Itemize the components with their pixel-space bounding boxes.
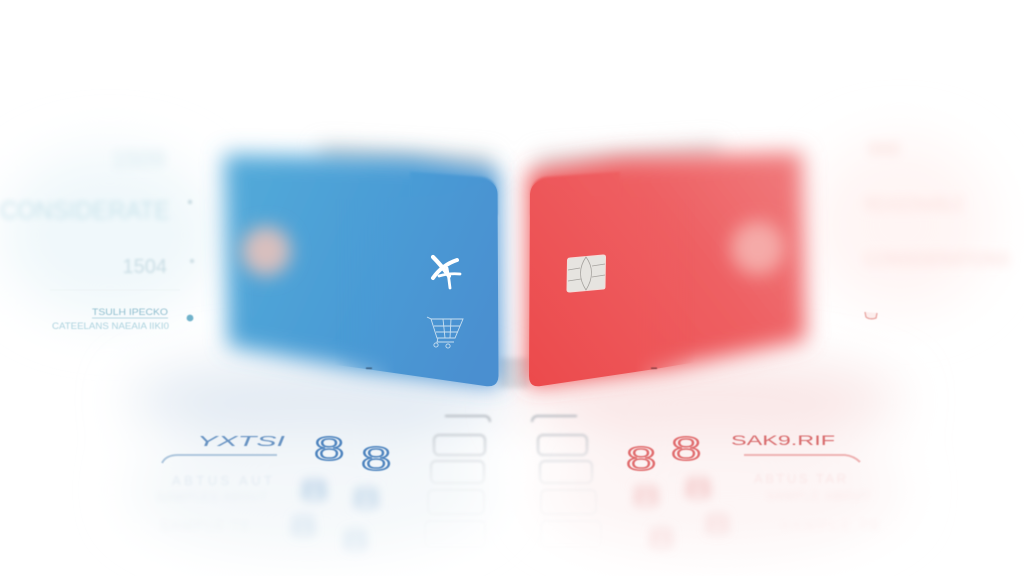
left specification list bbox=[0, 146, 194, 332]
bottom right table bbox=[532, 416, 880, 555]
bottom right table: SAMPLE ABOUT bbox=[766, 489, 871, 503]
label: wide heading: CONSIDERATE bbox=[0, 197, 170, 225]
numerals: blurred reflection rows: 8 bbox=[684, 471, 712, 504]
numerals: blurred reflection rows: 8 bbox=[290, 510, 317, 543]
label: top value: 1509 bbox=[112, 146, 165, 173]
card face: soft upper corner bbox=[531, 172, 620, 215]
blurred chip bbox=[241, 226, 291, 276]
blurred sub-labels: ABTUS TAR bbox=[754, 471, 846, 486]
numerals: blurred reflection rows: 8 bbox=[352, 481, 380, 514]
bottom left table bbox=[156, 416, 490, 557]
numerals: blurred reflection rows: 8 bbox=[300, 473, 328, 506]
card face: sharp part bbox=[342, 183, 498, 386]
numerals: blurred reflection rows: 8 bbox=[632, 479, 660, 512]
numerals: blurred reflection rows: 8 bbox=[648, 522, 675, 555]
numerals: blurred reflection rows bbox=[290, 473, 380, 557]
table boxes bbox=[425, 416, 490, 547]
blurred chip bbox=[731, 221, 785, 275]
heading rule bbox=[744, 455, 860, 462]
dots: faint markers bbox=[188, 200, 194, 263]
shadow behind card tops bbox=[320, 144, 720, 176]
numerals: top row: 8 bbox=[626, 440, 656, 477]
card feet bbox=[366, 368, 657, 369]
label: year value: 1504 bbox=[122, 256, 167, 278]
bottom left table: SAMPLES ABOUT bbox=[156, 490, 269, 504]
numerals: top row: 8 bbox=[671, 430, 701, 467]
haze: right of the red card bbox=[810, 140, 990, 310]
floor tint: red side bbox=[520, 360, 900, 550]
icon: card chip bbox=[567, 255, 606, 292]
haze: left of the blue card bbox=[0, 150, 220, 320]
heading rule bbox=[162, 455, 277, 463]
card face: sharp part bbox=[529, 183, 688, 386]
bottom right table: SAMPLE TE bbox=[780, 517, 880, 533]
table boxes bbox=[532, 416, 601, 547]
heading: YXTSI bbox=[197, 433, 285, 450]
numerals: blurred reflection rows: 8 bbox=[342, 524, 369, 557]
rule lines bbox=[50, 290, 180, 318]
label: detail line one: TSULH IPECKO bbox=[92, 307, 168, 318]
numerals: top row bbox=[626, 430, 701, 477]
right specification list bbox=[864, 142, 1010, 319]
heading: SAK9.RIF bbox=[731, 432, 835, 448]
numerals: blurred reflection rows bbox=[632, 471, 731, 555]
bottom left table: SAMPLE TE bbox=[160, 517, 250, 533]
icon: airplane bbox=[433, 257, 460, 288]
label: detail line two: CATEELANS NAEAIA IIKI0 bbox=[52, 321, 169, 332]
numerals: top row: 8 bbox=[314, 430, 344, 467]
floor tint: blue side bbox=[130, 360, 510, 550]
numerals: top row bbox=[314, 430, 391, 477]
shadow between the cards bbox=[499, 358, 529, 388]
bar: blurred heading: REASONABLE bbox=[864, 194, 964, 216]
card face: soft upper corner bbox=[410, 172, 497, 215]
card face: blurred part bbox=[224, 154, 500, 386]
dot: detail marker bbox=[187, 315, 193, 321]
numerals: blurred reflection rows: 8 bbox=[704, 508, 731, 541]
numerals: top row: 8 bbox=[361, 440, 391, 477]
card: red bbox=[528, 152, 806, 386]
icon: shopping cart bbox=[427, 317, 463, 348]
icon: small red cup bbox=[865, 312, 877, 319]
card face: blurred part bbox=[528, 152, 806, 386]
bar: blurred top value bbox=[868, 142, 900, 156]
card: blue bbox=[224, 154, 500, 386]
blurred sub-labels: ABTUS AUT bbox=[172, 473, 272, 488]
